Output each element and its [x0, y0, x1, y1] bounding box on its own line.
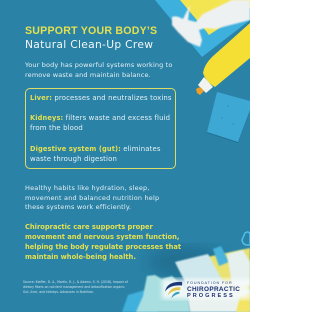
yellow bottle	[196, 23, 250, 95]
blue cloth top right	[155, 0, 250, 57]
source note: Source: Kieffer, D. A., Martin, R. J., & Adams, S. H. (2016). Impact of	[23, 280, 128, 284]
intro text: remove waste and maintain balance.	[25, 71, 151, 79]
habits text: these systems work efficiently.	[25, 203, 131, 211]
kidneys item	[30, 114, 170, 132]
habits text: movement and balanced nutrition help	[25, 194, 159, 202]
liver item: Liver: processes and neutralizes toxins	[30, 94, 172, 102]
source note: dietary fibers on nutrient management and detoxification organs:	[23, 285, 125, 289]
digestive item: waste through digestion	[30, 155, 117, 163]
spray bottle	[172, 0, 250, 47]
source note	[23, 280, 128, 294]
logo: foundation for chiropractic progress	[165, 281, 240, 299]
source note: Gut, liver, and kidneys. Advances in Nutrition.	[23, 290, 94, 294]
icon: logo swirl	[165, 282, 182, 298]
blue sponge	[207, 92, 250, 143]
habits text	[25, 184, 159, 211]
chiropractic callout: helping the body regulate processes that	[25, 243, 181, 251]
yellow cloth top right	[180, 0, 250, 35]
habits text: Healthy habits like hydration, sleep,	[25, 184, 150, 192]
title line 2: Natural Clean-Up Crew	[25, 38, 153, 51]
chiropractic callout: movement and nervous system function,	[25, 233, 179, 241]
intro text: Your body has powerful systems working to	[25, 61, 172, 69]
logo text line 2: CHIROPRACTIC	[187, 286, 240, 293]
logo text line 1: FOUNDATION FOR	[187, 281, 233, 285]
title line 1: SUPPORT YOUR BODY’S	[25, 25, 157, 37]
intro text	[25, 61, 172, 79]
chiropractic callout: maintain whole-being health.	[25, 253, 136, 261]
logo text line 3: PROGRESS	[187, 293, 235, 299]
digestive item	[30, 145, 161, 163]
digestive item: Digestive system (gut): eliminates	[30, 145, 161, 153]
kidneys item: Kidneys: filters waste and excess fluid	[30, 114, 170, 122]
background with cleaning supplies	[122, 0, 250, 312]
kidneys item: from the blood	[30, 124, 83, 132]
chiropractic callout	[25, 223, 181, 261]
panel: body systems	[25, 88, 176, 169]
bottom right supplies	[122, 232, 250, 312]
chiropractic callout: Chiropractic care supports proper	[25, 223, 153, 231]
